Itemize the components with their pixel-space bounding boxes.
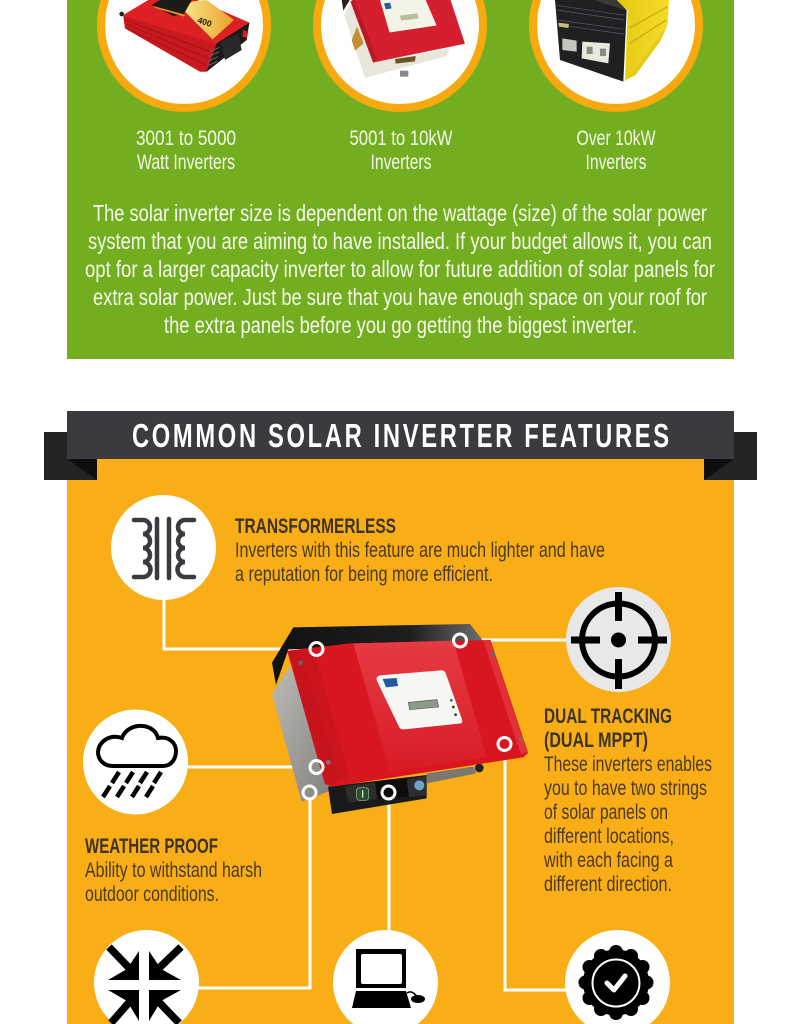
caption: inverters: Inverters xyxy=(370,151,432,174)
icon: rain cloud xyxy=(83,710,188,814)
callout dot: computer xyxy=(382,786,395,799)
connector lines xyxy=(164,598,568,990)
heading ribbon: COMMON SOLAR INVERTER FEATURES xyxy=(132,418,669,455)
panel: common features xyxy=(44,411,757,1024)
callout dot: warranty xyxy=(498,738,511,750)
text: transformerless: TRANSFORMERLESS xyxy=(235,515,396,538)
text: dual tracking: DUAL TRACKING xyxy=(544,705,672,728)
text: dual tracking: with each facing a xyxy=(543,849,673,872)
text: weather proof: outdoor conditions. xyxy=(85,883,219,906)
panel: inverter sizes xyxy=(67,0,734,359)
text: dual tracking: of solar panels on xyxy=(544,801,668,824)
caption: watt inverters: Watt Inverters xyxy=(137,151,235,174)
callout dot: dual tracking xyxy=(454,634,466,647)
text: transformerless: a reputation for being more efficient. xyxy=(235,563,493,586)
text: dual tracking: These inverters enables xyxy=(544,753,712,776)
icon: compact arrows xyxy=(94,930,199,1024)
text: weather proof: Ability to withstand harsh xyxy=(85,859,262,882)
text: dual tracking xyxy=(543,705,712,896)
text: dual tracking: (DUAL MPPT) xyxy=(544,729,648,752)
text: dual tracking: different direction. xyxy=(544,873,672,896)
inverter illustration xyxy=(272,624,527,814)
icon: computer xyxy=(333,930,438,1024)
caption: 5001 to 10kW: 5001 to 10kW xyxy=(350,127,453,150)
icon: quality badge xyxy=(565,930,670,1024)
text: dual tracking: different locations, xyxy=(544,825,674,848)
icon: medium inverter xyxy=(317,0,483,108)
caption: over 10kW: Over 10kW xyxy=(576,127,656,150)
text block: sizing explanation xyxy=(85,200,715,338)
text block: sizing explanation: the extra panels before you go getting the biggest inverter. xyxy=(164,312,637,338)
callout dot: compact xyxy=(303,786,316,799)
icon: crosshair target xyxy=(566,587,671,692)
caption: 3001 to 5000: 3001 to 5000 xyxy=(136,127,236,150)
callout dot: weather proof xyxy=(310,760,323,774)
caption: inverters: Inverters xyxy=(586,151,646,174)
icon: transformer xyxy=(111,495,216,600)
text: weather proof xyxy=(85,835,262,906)
text: transformerless xyxy=(235,515,605,586)
text: dual tracking: you to have two strings xyxy=(544,777,707,800)
text: weather proof: WEATHER PROOF xyxy=(85,835,218,858)
text: transformerless: Inverters with this feature are much lighter and have xyxy=(235,539,605,562)
callout dot: transformerless xyxy=(310,642,323,656)
icon: small inverter xyxy=(101,0,267,108)
icon: small inverter: 400 xyxy=(196,15,213,29)
heading ribbon xyxy=(44,411,757,480)
icon: large inverter xyxy=(533,0,699,108)
